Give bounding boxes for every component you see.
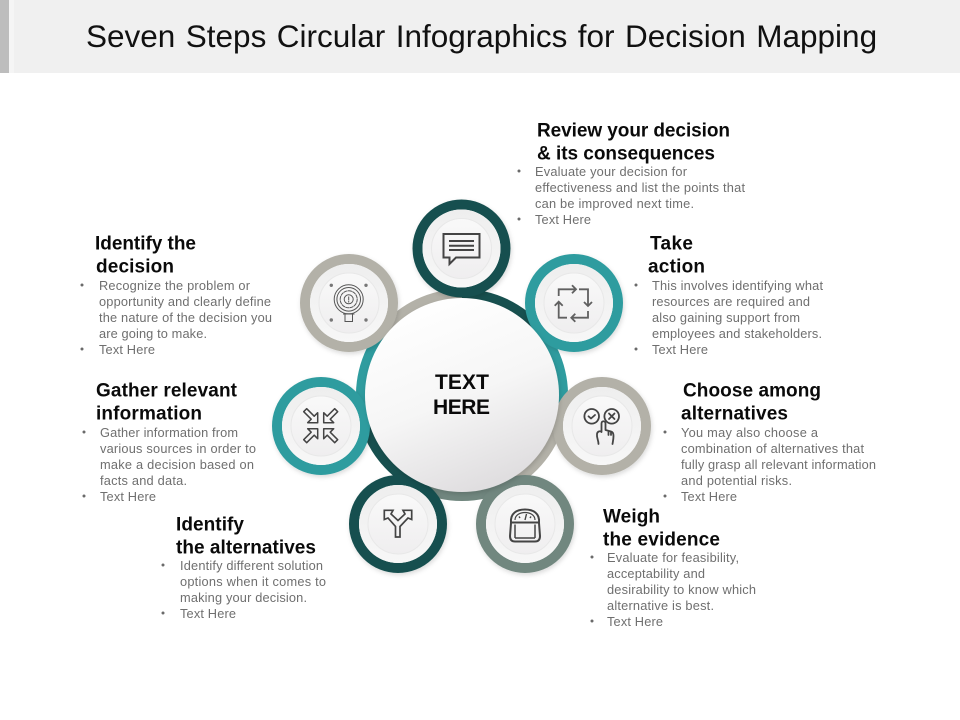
centre disc <box>365 298 559 492</box>
text block: identify the alternatives: options when it comes to <box>180 574 326 589</box>
text block: take action: This involves identifying what <box>652 278 823 293</box>
text block: gather relevant information: information <box>96 404 202 424</box>
text block: identify the decision: the nature of the decision you <box>99 310 272 325</box>
text block: review your decision: & its consequences <box>537 144 715 164</box>
text block: weigh the evidence: Weigh <box>603 506 660 528</box>
text block: weigh the evidence <box>590 506 756 629</box>
icon: loop of four arrows <box>555 285 592 322</box>
centre label: TEXT <box>435 371 489 394</box>
text block: choose among alternatives: Text Here <box>681 489 737 504</box>
text block: gather relevant information: various sources in order to <box>100 441 256 456</box>
text block: review your decision <box>518 120 745 227</box>
text block: identify the decision: Identify the <box>95 234 196 254</box>
centre label: HERE <box>433 396 490 419</box>
icon: check and cross with pointing hand <box>584 409 619 444</box>
text block: weigh the evidence: acceptability and <box>607 566 705 581</box>
text block: choose among alternatives: Choose among <box>683 380 821 402</box>
text block: weigh the evidence: alternative is best. <box>607 598 714 613</box>
node: gather information <box>277 382 365 470</box>
text block: choose among alternatives: You may also choose a <box>681 425 819 440</box>
central ring of seven arc segments <box>361 294 563 496</box>
text block: review your decision: can be improved next time. <box>535 196 694 211</box>
text block: identify the decision: are going to make. <box>99 326 207 341</box>
icon: corner dots <box>330 284 368 322</box>
text block: weigh the evidence: Evaluate for feasibility, <box>607 550 739 565</box>
node: choose among alternatives <box>558 382 646 470</box>
text block: identify the decision: opportunity and clearly define <box>99 294 271 309</box>
text block: review your decision: Evaluate your decision for <box>535 164 688 179</box>
icon: speech bubble <box>444 234 480 264</box>
text block: take action: employees and stakeholders. <box>652 326 822 341</box>
node: weigh the evidence <box>481 480 569 568</box>
node: take action <box>530 259 618 347</box>
text block: identify the alternatives: Identify <box>176 514 244 536</box>
text block: take action: action <box>648 256 705 278</box>
text block: take action <box>634 234 823 357</box>
title: Seven Steps Circular Infographics for Decision Mapping <box>86 18 877 54</box>
icon: forking arrow <box>384 510 412 537</box>
text block: identify the decision <box>80 234 272 357</box>
text block: take action: also gaining support from <box>652 310 800 325</box>
text block: weigh the evidence: Text Here <box>607 614 663 629</box>
text block: take action: Take <box>650 234 693 254</box>
node: identify the decision <box>305 259 393 347</box>
header band <box>0 0 960 73</box>
text block: identify the alternatives: Identify different solution <box>180 558 323 573</box>
text block: review your decision: Text Here <box>535 212 591 227</box>
text block: weigh the evidence: desirability to know which <box>607 582 756 597</box>
text block: review your decision: effectiveness and list the points that <box>535 180 745 195</box>
text block: take action: Text Here <box>652 342 708 357</box>
text block: identify the decision: Recognize the problem or <box>99 278 251 293</box>
text block: take action: resources are required and <box>652 294 810 309</box>
node: identify the alternatives <box>354 480 442 568</box>
node: review (top) <box>418 204 506 292</box>
text block: identify the decision: Text Here <box>99 342 155 357</box>
centre label <box>433 371 490 419</box>
text block: gather relevant information: make a decision based on <box>100 457 254 472</box>
text block: choose among alternatives: combination of alternatives that <box>681 441 864 456</box>
text block: gather relevant information: Text Here <box>100 489 156 504</box>
icon: gear light bulb <box>334 285 363 322</box>
text block: identify the decision: decision <box>96 256 174 278</box>
text block: identify the alternatives: making your decision. <box>180 590 307 605</box>
text block: identify the alternatives: Text Here <box>180 606 236 621</box>
icon: weighing scale <box>510 510 540 542</box>
icon: four hollow arrows pointing inward <box>304 409 338 443</box>
text block: identify the alternatives: the alternatives <box>176 538 316 558</box>
text block: gather relevant information <box>82 380 256 504</box>
text block: gather relevant information: Gather relevant <box>96 380 238 402</box>
text block: choose among alternatives: fully grasp all relevant information <box>681 457 876 472</box>
text block: gather relevant information: facts and data. <box>100 473 187 488</box>
text block: weigh the evidence: the evidence <box>603 530 720 550</box>
text block: choose among alternatives <box>664 380 876 504</box>
text block: gather relevant information: Gather information from <box>100 425 238 440</box>
text block: choose among alternatives: and potential risks. <box>681 473 792 488</box>
text block: review your decision: Review your decision <box>537 120 730 142</box>
text block: identify the alternatives <box>162 514 326 621</box>
text block: choose among alternatives: alternatives <box>681 404 788 424</box>
